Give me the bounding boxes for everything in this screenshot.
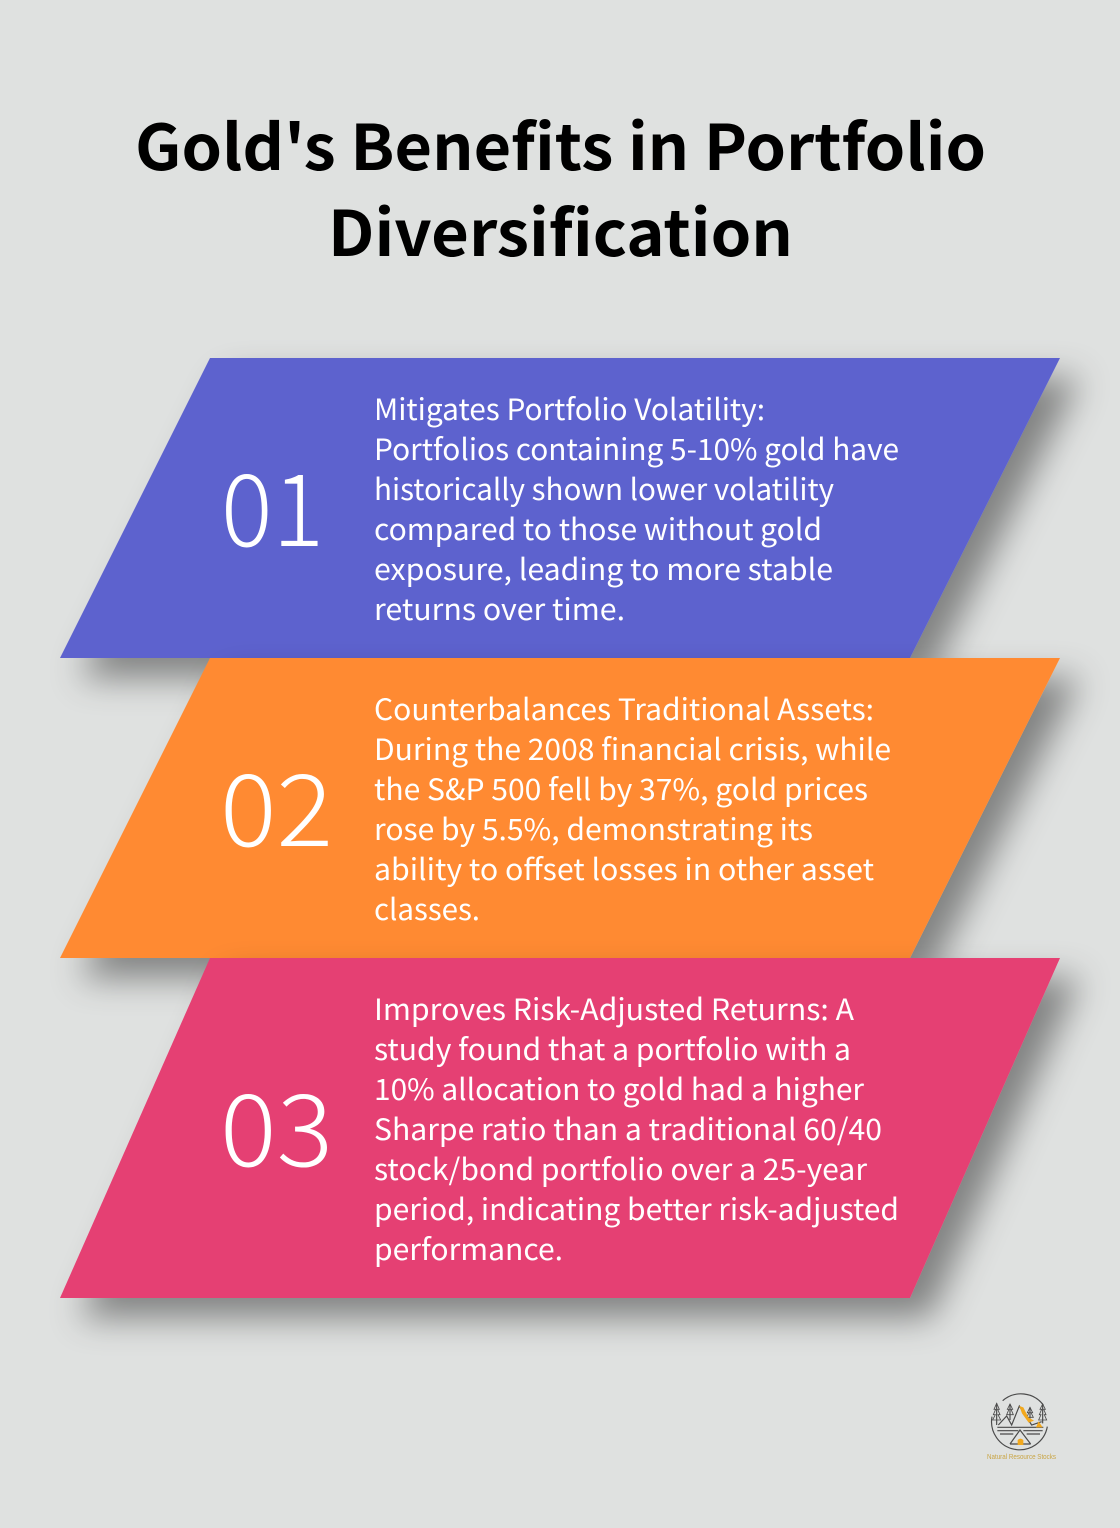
text block 01: compared to those without gold [374,507,822,549]
text block 03 [374,987,899,1269]
text block 03: stock/bond portfolio over a 25-year [374,1147,868,1189]
tree foliage [993,1403,1047,1420]
text block 02: During the 2008 financial crisis, while [374,727,891,769]
text block 01: returns over time. [374,587,625,629]
title: Gold's Benefits in Portfolio [135,98,986,189]
text block 02: classes. [374,887,480,929]
text block 01 [374,387,899,629]
text block 02: rose by 5.5%, demonstrating its [374,807,813,849]
text block 02: ability to offset losses in other asset [374,847,874,889]
text block 03: 10% allocation to gold had a higher [374,1067,865,1109]
number 01: 01 [221,430,324,575]
panel shape: pink [60,958,1060,1298]
title [135,98,986,275]
text block 01: Portfolios containing 5-10% gold have [374,427,899,469]
text block 02: the S&P 500 fell by 37%, gold prices [374,767,868,809]
text block 03: performance. [374,1227,563,1269]
text block 01: historically shown lower volatility [374,467,834,509]
panel: 03 risk-adjusted returns [60,958,1060,1298]
number 02: 02 [220,730,333,875]
text block 03: Sharpe ratio than a traditional 60/40 [374,1107,882,1149]
text block 02: Counterbalances Traditional Assets: [374,687,874,729]
text block 01: Mitigates Portfolio Volatility: [374,387,765,429]
panel: 01 mitigates volatility [60,358,1060,658]
text block 01: exposure, leading to more stable [374,547,833,589]
text block 03: Improves Risk-Adjusted Returns: A [374,987,854,1029]
panel shape: orange [60,658,1060,958]
icon: logo [992,1394,1047,1450]
panel shape: purple [60,358,1060,658]
number 03: 03 [220,1050,333,1195]
logo caption: Natural Resource Stocks [987,1454,1056,1461]
text block 03: study found that a portfolio with a [374,1027,851,1069]
text block 02 [374,687,891,929]
text block 03: period, indicating better risk-adjusted [374,1187,899,1229]
title: Diversification [328,184,793,275]
panel: 02 counterbalances assets [60,658,1060,958]
